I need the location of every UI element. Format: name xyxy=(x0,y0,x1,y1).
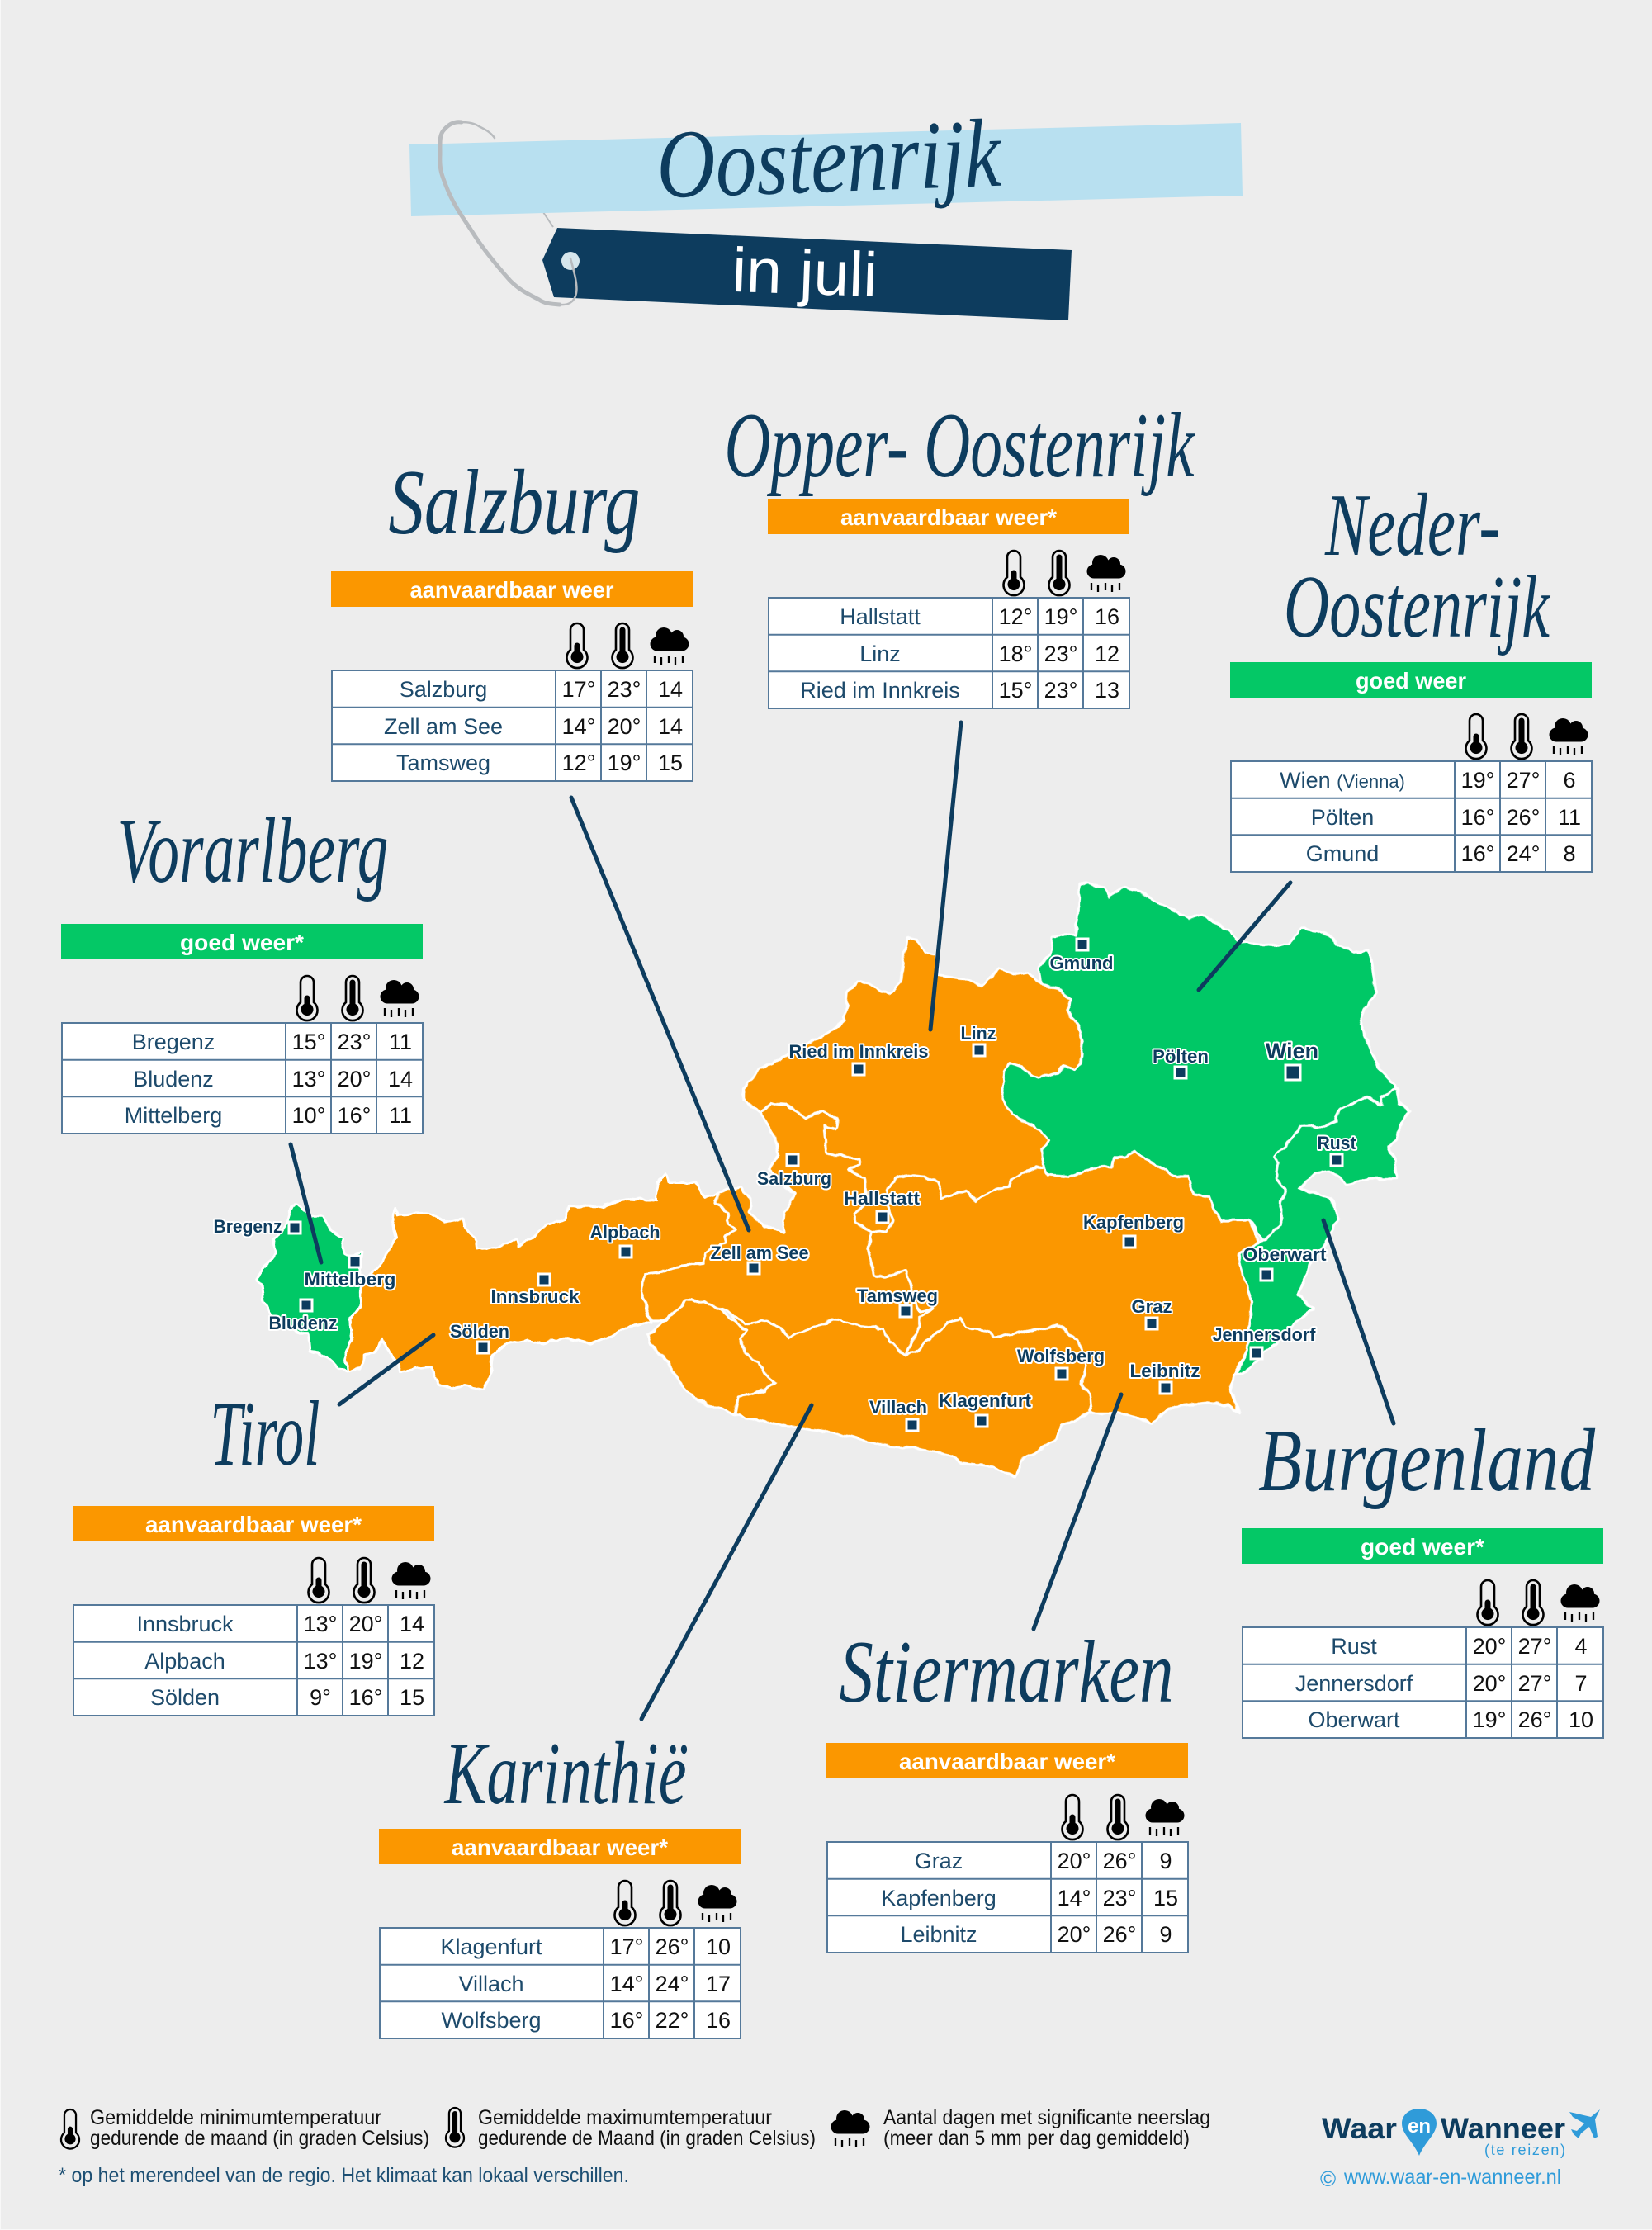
legend: precipitation: (meer dan 5 mm per dag gemiddeld) xyxy=(883,2127,1190,2150)
logo: Waar en Wanneer xyxy=(1320,2109,1600,2191)
heading: Stiermarken: Stiermarken xyxy=(839,1623,1174,1721)
light blue title band xyxy=(409,123,1243,216)
column icons xyxy=(566,623,689,668)
data table: 26° xyxy=(1103,1922,1136,1947)
legend: minimum temperature xyxy=(61,2106,429,2150)
data table: Villach xyxy=(458,1972,524,1996)
data table: 26° xyxy=(1507,805,1540,830)
legend: maximum temperature xyxy=(446,2106,816,2150)
callout line: Vorarlberg xyxy=(291,1144,321,1262)
city: Linz: Linz xyxy=(961,1023,996,1044)
data table: Gmund xyxy=(1306,841,1379,866)
data table: 23° xyxy=(1044,678,1077,703)
data table: 26° xyxy=(1103,1849,1136,1873)
data table xyxy=(332,670,693,781)
city: Jennersdorf: Jennersdorf xyxy=(1212,1324,1316,1345)
status bar: goed weer xyxy=(1356,668,1466,694)
legend: minimum temperature: gedurende de maand (in graden Celsius) xyxy=(90,2127,429,2150)
status bar xyxy=(826,1743,1188,1778)
data table: 26° xyxy=(1518,1707,1551,1732)
data table: 19° xyxy=(1044,604,1077,629)
city: Pölten xyxy=(1153,1046,1209,1078)
city: Wien xyxy=(1266,1039,1318,1080)
city: Leibnitz xyxy=(1129,1361,1200,1394)
heading: Salzburg: Salzburg xyxy=(388,452,641,554)
city: Ried im Innkreis xyxy=(789,1041,928,1075)
callout line: Burgenland xyxy=(1323,1220,1394,1423)
main title: Oostenrijk xyxy=(655,99,1004,219)
footnote: * op het merendeel van de regio. Het klimaat kan lokaal verschillen. xyxy=(59,2164,629,2187)
dark tag xyxy=(542,228,1072,320)
legend: maximum temperature: gedurende de Maand (in graden Celsius) xyxy=(478,2127,816,2150)
logo plane xyxy=(1569,2109,1600,2138)
data table: 15° xyxy=(999,678,1032,703)
data table: 12° xyxy=(999,604,1032,629)
city: Sölden xyxy=(450,1321,509,1353)
title banner xyxy=(409,99,1243,320)
city: Graz: Graz xyxy=(1131,1296,1172,1317)
legend: precipitation: Aantal dagen met significante neerslag xyxy=(883,2106,1210,2129)
data table: Bregenz xyxy=(132,1030,215,1054)
city: Graz xyxy=(1131,1296,1172,1329)
status bar: goed weer* xyxy=(1361,1534,1484,1560)
data table: Rust xyxy=(1331,1634,1377,1659)
panel: Karinthië xyxy=(379,1725,741,2038)
status bar xyxy=(61,924,423,959)
data table: 16° xyxy=(349,1685,382,1710)
data table: 14 xyxy=(388,1067,413,1091)
subtitle: in juli xyxy=(731,235,878,310)
logo wordmark right: Wanneer xyxy=(1441,2113,1565,2145)
data table: 11 xyxy=(389,1103,412,1128)
city: Mittelberg: Mittelberg xyxy=(304,1269,396,1290)
city: Wien: Wien xyxy=(1266,1039,1318,1063)
city: Tamsweg: Tamsweg xyxy=(857,1285,938,1306)
city: Alpbach xyxy=(589,1222,660,1257)
eastern regions xyxy=(642,883,1410,1477)
city: Villach: Villach xyxy=(869,1397,927,1418)
data table: Zell am See xyxy=(384,714,503,739)
panel: Opper-Oostenrijk xyxy=(725,395,1195,708)
data table: 26° xyxy=(656,1934,689,1959)
city: Wolfsberg xyxy=(1017,1346,1105,1380)
legend: minimum temperature: Gemiddelde minimumtemperatuur xyxy=(90,2106,381,2129)
heading: Karinthië: Karinthië xyxy=(443,1725,687,1823)
city: Hallstatt: Hallstatt xyxy=(844,1188,921,1209)
city: Rust xyxy=(1318,1133,1356,1166)
data table: 20° xyxy=(349,1612,382,1636)
legend: maximum temperature: Gemiddelde maximumtemperatuur xyxy=(478,2106,772,2129)
city: Hallstatt xyxy=(844,1188,921,1223)
city: Gmund: Gmund xyxy=(1050,953,1113,973)
logo copyright mark: © xyxy=(1320,2166,1336,2191)
data table: 13° xyxy=(292,1067,325,1091)
data table: 15 xyxy=(658,750,683,775)
panel: Neder-Oostenrijk xyxy=(1230,476,1592,872)
data table: Hallstatt xyxy=(840,604,921,629)
data table: 10° xyxy=(292,1103,325,1128)
data table: Oberwart xyxy=(1308,1707,1400,1732)
tag string xyxy=(440,122,576,305)
city: Oberwart xyxy=(1243,1244,1327,1281)
data table xyxy=(827,1842,1188,1953)
data table xyxy=(1231,761,1592,872)
data table: 24° xyxy=(1507,841,1540,866)
heading: Neder-Oostenrijk xyxy=(1284,476,1550,656)
data table xyxy=(73,1605,434,1716)
panel: Tirol xyxy=(73,1383,434,1716)
tag hole xyxy=(561,252,580,270)
city: Leibnitz: Leibnitz xyxy=(1129,1361,1200,1381)
data table: 11 xyxy=(1558,805,1581,830)
city: Gmund xyxy=(1050,939,1113,973)
region: Salzburg xyxy=(642,1104,933,1355)
data table: 15 xyxy=(400,1685,424,1710)
column icons xyxy=(1478,1580,1600,1625)
data table: Wien (Vienna) xyxy=(1280,768,1405,793)
tag string hidden end xyxy=(543,212,553,227)
city: Pölten: Pölten xyxy=(1153,1046,1209,1067)
column icons xyxy=(1004,551,1126,595)
data table: 16° xyxy=(610,2008,643,2033)
data table: 15 xyxy=(1153,1886,1178,1910)
city: Klagenfurt: Klagenfurt xyxy=(939,1390,1032,1411)
data table: 22° xyxy=(656,2008,689,2033)
region: Karinthië xyxy=(733,1314,1091,1477)
column icons xyxy=(1062,1795,1184,1839)
logo tagline: (te reizen) xyxy=(1484,2142,1565,2158)
panel: Vorarlberg xyxy=(61,800,423,1134)
city: Villach xyxy=(869,1397,927,1431)
data table: 11 xyxy=(389,1030,412,1054)
callout line: Salzburg xyxy=(571,798,749,1230)
data table: Innsbruck xyxy=(136,1612,234,1636)
data table: Jennersdorf xyxy=(1295,1671,1413,1696)
callout line: Tirol xyxy=(339,1335,433,1404)
data table: Pölten xyxy=(1311,805,1374,830)
city: Innsbruck: Innsbruck xyxy=(490,1286,580,1307)
column icons xyxy=(297,976,419,1020)
region: Stiermarken xyxy=(868,1151,1258,1423)
data table: 19° xyxy=(1461,768,1494,793)
data table: 9° xyxy=(310,1685,331,1710)
data table: 14 xyxy=(400,1612,424,1636)
heading: Neder-Oostenrijk: Oostenrijk xyxy=(1284,558,1550,656)
data table: Bludenz xyxy=(133,1067,214,1091)
callout line: Karinthië xyxy=(641,1405,812,1719)
city: Oberwart: Oberwart xyxy=(1243,1244,1327,1265)
data table: 17 xyxy=(706,1972,731,1996)
legend: precipitation xyxy=(831,2106,1210,2150)
data table: 19° xyxy=(1473,1707,1506,1732)
city: Klagenfurt xyxy=(939,1390,1032,1427)
region: Burgenland xyxy=(1236,1089,1410,1375)
status bar xyxy=(1242,1528,1603,1564)
data table: Tamsweg xyxy=(396,750,490,775)
logo pin xyxy=(1402,2109,1437,2156)
data table: 12° xyxy=(562,750,595,775)
map regions xyxy=(257,883,1410,1477)
status bar: aanvaardbaar weer* xyxy=(452,1835,668,1860)
data table: Linz xyxy=(859,642,901,666)
panel: Salzburg xyxy=(331,452,693,781)
data table: 9 xyxy=(1159,1922,1172,1947)
city: Zell am See: Zell am See xyxy=(710,1243,809,1263)
region: Opper-Oostenrijk xyxy=(743,939,1082,1233)
heading: Tirol: Tirol xyxy=(210,1383,320,1485)
data table: 10 xyxy=(1569,1707,1593,1732)
data table xyxy=(380,1928,741,2038)
data table: 23° xyxy=(1044,642,1077,666)
data table: Leibnitz xyxy=(900,1922,977,1947)
data table: 20° xyxy=(1473,1634,1506,1659)
heading: Neder-Oostenrijk: Neder- xyxy=(1324,476,1500,575)
city: Bludenz: Bludenz xyxy=(269,1313,337,1333)
callout line: Opper-Oostenrijk xyxy=(930,722,961,1030)
data table: 13 xyxy=(1095,678,1119,703)
data table: 27° xyxy=(1518,1671,1551,1696)
data table: 27° xyxy=(1507,768,1540,793)
data table: 16° xyxy=(1461,841,1494,866)
status bar: goed weer* xyxy=(180,930,304,955)
status bar: aanvaardbaar weer* xyxy=(145,1512,362,1537)
city: Jennersdorf xyxy=(1212,1324,1316,1359)
data table: Klagenfurt xyxy=(440,1934,542,1959)
data table: 16 xyxy=(1095,604,1119,629)
data table: 12 xyxy=(1095,642,1119,666)
city: Kapfenberg: Kapfenberg xyxy=(1083,1212,1184,1233)
data table: 14 xyxy=(658,677,683,702)
data table: 18° xyxy=(999,642,1032,666)
panel: Burgenland xyxy=(1242,1412,1603,1738)
city: Alpbach: Alpbach xyxy=(589,1222,660,1243)
map of Austria xyxy=(213,722,1410,1719)
status bar: aanvaardbaar weer* xyxy=(840,504,1057,530)
region: Tirol xyxy=(346,1174,736,1389)
data table: 8 xyxy=(1563,841,1576,866)
legend xyxy=(59,2106,1210,2187)
data table xyxy=(1243,1627,1603,1738)
data table: 14° xyxy=(1058,1886,1091,1910)
data table: 23° xyxy=(608,677,641,702)
status bar xyxy=(73,1506,434,1541)
city: Bludenz xyxy=(269,1300,337,1333)
data table: Salzburg xyxy=(400,677,487,702)
city: Salzburg: Salzburg xyxy=(757,1168,831,1189)
data table: 17° xyxy=(610,1934,643,1959)
city: Tamsweg xyxy=(857,1285,938,1317)
city: Rust: Rust xyxy=(1318,1133,1356,1153)
data table: 14° xyxy=(562,714,595,739)
data table: 14 xyxy=(658,714,683,739)
data table: 20° xyxy=(1473,1671,1506,1696)
data table xyxy=(769,598,1129,708)
region: Oost-Tirol xyxy=(648,1301,774,1415)
data table: 24° xyxy=(656,1972,689,1996)
column icons xyxy=(309,1558,431,1603)
data table: Wolfsberg xyxy=(441,2008,542,2033)
data table: 15° xyxy=(292,1030,325,1054)
data table: 4 xyxy=(1574,1634,1588,1659)
city: Salzburg xyxy=(757,1154,831,1189)
data table: Ried im Innkreis xyxy=(800,678,960,703)
data table: 12 xyxy=(400,1649,424,1674)
data table: Mittelberg xyxy=(125,1103,222,1128)
column icons xyxy=(614,1881,736,1925)
data table: 20° xyxy=(338,1067,371,1091)
status bar xyxy=(379,1829,741,1864)
data table: 20° xyxy=(1058,1849,1091,1873)
region: Neder-Oostenrijk xyxy=(1003,883,1397,1241)
data table: 16 xyxy=(706,2008,731,2033)
city: Kapfenberg xyxy=(1083,1212,1184,1248)
data table: Graz xyxy=(915,1849,963,1873)
city: Bregenz: Bregenz xyxy=(213,1216,282,1237)
status bar xyxy=(1230,662,1592,698)
data table: 13° xyxy=(304,1649,337,1674)
heading: Opper-Oostenrijk: Opper- Oostenrijk xyxy=(725,395,1195,497)
city: Zell am See xyxy=(710,1243,809,1274)
logo website: www.waar-en-wanneer.nl xyxy=(1343,2166,1561,2189)
data table: Alpbach xyxy=(144,1649,225,1674)
data table: 14° xyxy=(610,1972,643,1996)
data table: 27° xyxy=(1518,1634,1551,1659)
data table: 9 xyxy=(1159,1849,1172,1873)
region: Vorarlberg xyxy=(257,1205,362,1371)
data table: 20° xyxy=(608,714,641,739)
data table xyxy=(62,1023,423,1134)
data table: 16° xyxy=(1461,805,1494,830)
data table: 13° xyxy=(304,1612,337,1636)
city: Innsbruck xyxy=(490,1274,580,1307)
status bar xyxy=(768,499,1129,534)
status bar xyxy=(331,571,693,607)
city: Wolfsberg: Wolfsberg xyxy=(1017,1346,1105,1366)
city: Linz xyxy=(961,1023,996,1056)
column icons xyxy=(1466,714,1588,759)
data table: 7 xyxy=(1574,1671,1588,1696)
callout line: Neder-Oostenrijk xyxy=(1199,883,1290,990)
data table: 19° xyxy=(608,750,641,775)
callout line: Stiermarken xyxy=(1034,1394,1121,1629)
heading: Vorarlberg: Vorarlberg xyxy=(117,800,388,902)
logo pin word: en xyxy=(1408,2115,1431,2138)
data table: 19° xyxy=(349,1649,382,1674)
data table: Sölden xyxy=(150,1685,220,1710)
status bar: aanvaardbaar weer* xyxy=(899,1749,1115,1774)
data table: 17° xyxy=(562,677,595,702)
data table: 23° xyxy=(1103,1886,1136,1910)
panel: Stiermarken xyxy=(826,1623,1188,1953)
data table: 20° xyxy=(1058,1922,1091,1947)
logo wordmark left: Waar xyxy=(1322,2113,1397,2145)
data table: 23° xyxy=(338,1030,371,1054)
data table: Kapfenberg xyxy=(881,1886,996,1910)
data table: 6 xyxy=(1563,768,1576,793)
data table: 10 xyxy=(706,1934,731,1959)
status bar: aanvaardbaar weer xyxy=(409,577,614,603)
city: Sölden: Sölden xyxy=(450,1321,509,1342)
data table: 16° xyxy=(338,1103,371,1128)
city: Ried im Innkreis: Ried im Innkreis xyxy=(789,1041,928,1062)
city: Mittelberg xyxy=(304,1256,396,1290)
